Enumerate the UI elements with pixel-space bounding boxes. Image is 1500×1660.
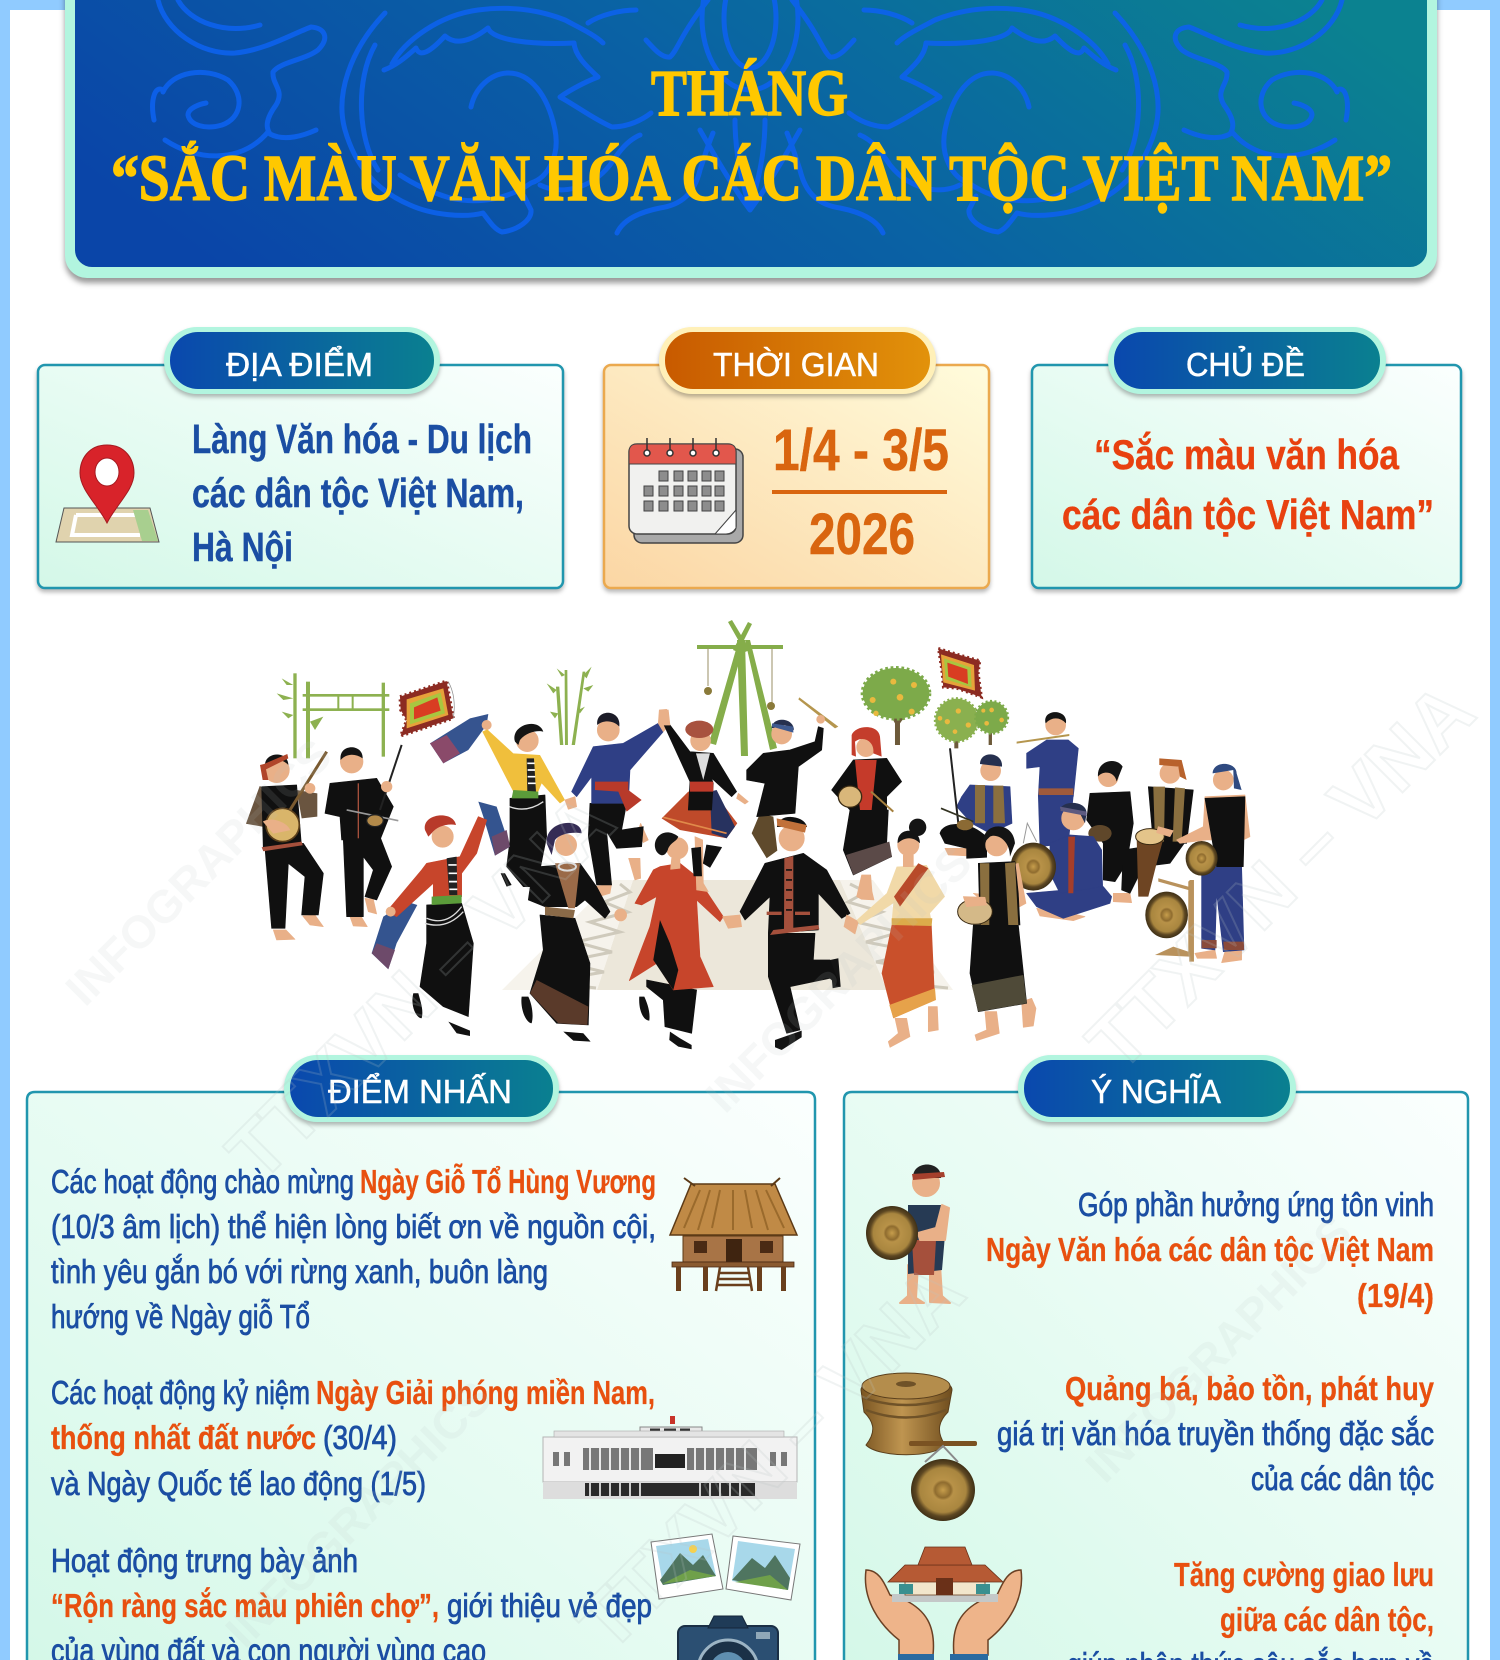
watermarks: TTXVN – VNA [1070, 666, 1491, 1087]
icon: bronze drum and gong [861, 1373, 977, 1521]
heading pill: địa điểm: ĐỊA ĐIỂM [226, 346, 373, 383]
theme text: “Sắc màu văn hóa [1094, 430, 1400, 478]
highlight text 3 [51, 1542, 652, 1660]
heading pill: địa điểm [164, 327, 440, 394]
meaning text 3: Tăng cường giao lưu [1174, 1556, 1434, 1593]
icon: stilt house [670, 1178, 797, 1291]
woman in cream blouse and orange skirt [857, 819, 945, 1047]
meaning text 1: (19/4) [1357, 1277, 1434, 1314]
icon: photographs [651, 1534, 800, 1600]
meaning text 3: giữa các dân tộc, [1220, 1601, 1434, 1638]
location text: Làng Văn hóa - Du lịch [192, 416, 532, 462]
heading pill: điểm nhấn [284, 1055, 559, 1122]
dates: 1/4 - 3/5 [773, 418, 949, 483]
dancers and musicians, left group [247, 667, 748, 1049]
highlight text 2 [51, 1374, 655, 1502]
highlight text 1: Ngày Giỗ Tổ Hùng Vương [360, 1163, 656, 1200]
heading pill: điểm nhấn: ĐIỂM NHẤN [328, 1073, 512, 1110]
bamboo clump [547, 667, 593, 745]
ornament pattern [153, 0, 1347, 233]
carpet [502, 880, 953, 990]
watermarks: TTXVN – VNA [560, 1246, 981, 1660]
highlight text 1 [51, 1163, 656, 1335]
watermarks [55, 666, 1491, 1660]
location text: các dân tộc Việt Nam, [192, 470, 524, 516]
left bamboo, kite and gate [277, 673, 454, 758]
heading pill: chủ đề: CHỦ ĐỀ [1186, 346, 1305, 383]
meaning text 2: Quảng bá, bảo tồn, phát huy [1065, 1370, 1435, 1407]
icon: hands holding temple [865, 1547, 1022, 1660]
main man in black [740, 817, 858, 1050]
woman in ao dai [629, 832, 742, 1049]
highlight text 1: hướng về Ngày giỗ Tổ [51, 1298, 310, 1335]
woman in yellow with scarf [430, 714, 565, 887]
man raising flute [747, 697, 838, 858]
musician with banjo [247, 752, 327, 940]
heading pill: thời gian [659, 327, 936, 394]
highlight text 2: và Ngày Quốc tế lao động (1/5) [51, 1465, 426, 1502]
standing man with flute [1017, 712, 1078, 847]
highlight text 2: Các hoạt động kỷ niệm [51, 1374, 310, 1411]
watermarks: INFOGRAPHICS [695, 836, 981, 1122]
highlight text 1: tình yêu gắn bó với rừng xanh, buôn làng [51, 1253, 548, 1290]
orange trees [863, 668, 1008, 748]
woman in Hmong dress [662, 710, 748, 892]
location text [192, 416, 532, 570]
watermarks: TTXVN – VNA [210, 776, 631, 1197]
kite [938, 648, 982, 697]
watermarks: INFOGRAPHICS [55, 729, 341, 1015]
panel: điểm nhấn [27, 1055, 815, 1660]
seated man with erhu [940, 748, 1012, 858]
theme text: các dân tộc Việt Nam” [1062, 491, 1434, 538]
woman with red headscarf [832, 727, 902, 900]
title [111, 57, 1392, 215]
meaning text 2 [997, 1370, 1435, 1497]
woman in black with silver necklace [521, 823, 627, 1042]
icon: man with gong [866, 1164, 950, 1303]
highlight text 2: Ngày Giải phóng miền Nam, [316, 1374, 655, 1411]
highlight text 3: “Rộn ràng sắc màu phiên chợ”, [51, 1587, 439, 1624]
heading pill: thời gian: THỜI GIAN [713, 346, 879, 383]
panel: thời gian [604, 327, 989, 588]
illustration: ethnic festival dancers [247, 620, 1250, 1050]
man with gong seated [1011, 803, 1112, 921]
icon: calendar [629, 438, 743, 543]
heading pill: ý nghĩa [1018, 1055, 1296, 1122]
man with hand drum [1113, 758, 1193, 903]
heading pill: ý nghĩa: Ý NGHĨA [1091, 1073, 1221, 1110]
dates: 2026 [809, 502, 915, 567]
panel: địa điểm [38, 327, 563, 588]
highlight text 3: giới thiệu vẻ đẹp [447, 1587, 652, 1624]
icon: camera [678, 1616, 778, 1660]
woman in red tunic and blue scarf [372, 802, 510, 1036]
central bamboo tripod [697, 620, 783, 756]
title: THÁNG [651, 57, 848, 130]
highlight text 2: thống nhất đất nước [51, 1419, 316, 1456]
woman with drum [958, 826, 1036, 1041]
seated woman [1087, 761, 1133, 882]
meaning text 3 [1067, 1556, 1434, 1660]
icon: independence palace [543, 1416, 797, 1499]
man with gongs [1145, 764, 1250, 963]
highlight text 2: (30/4) [323, 1419, 397, 1456]
musician with erhu [325, 745, 402, 927]
man in blue with red sash [565, 709, 669, 897]
icon: map pin [56, 445, 159, 542]
dancers and musicians, right group [740, 648, 1250, 1050]
highlight text 1: (10/3 âm lịch) thể hiện lòng biết ơn về nguồn cội, [51, 1208, 656, 1245]
dates [772, 418, 949, 567]
watermarks: INFOGRAPHICS [1075, 1206, 1361, 1492]
header banner [65, 0, 1437, 278]
meaning text 1 [986, 1186, 1434, 1314]
location text: Hà Nội [192, 524, 293, 570]
panel: chủ đề [1032, 327, 1461, 588]
meaning text 2: của các dân tộc [1251, 1460, 1434, 1497]
highlight text 1: Các hoạt động chào mừng [51, 1163, 354, 1200]
highlight text 3: Hoạt động trưng bày ảnh [51, 1542, 358, 1579]
theme text [1062, 430, 1434, 538]
watermarks: INFOGRAPHICS [215, 1371, 501, 1657]
heading pill: chủ đề [1108, 327, 1386, 394]
panel: ý nghĩa [844, 1055, 1468, 1660]
